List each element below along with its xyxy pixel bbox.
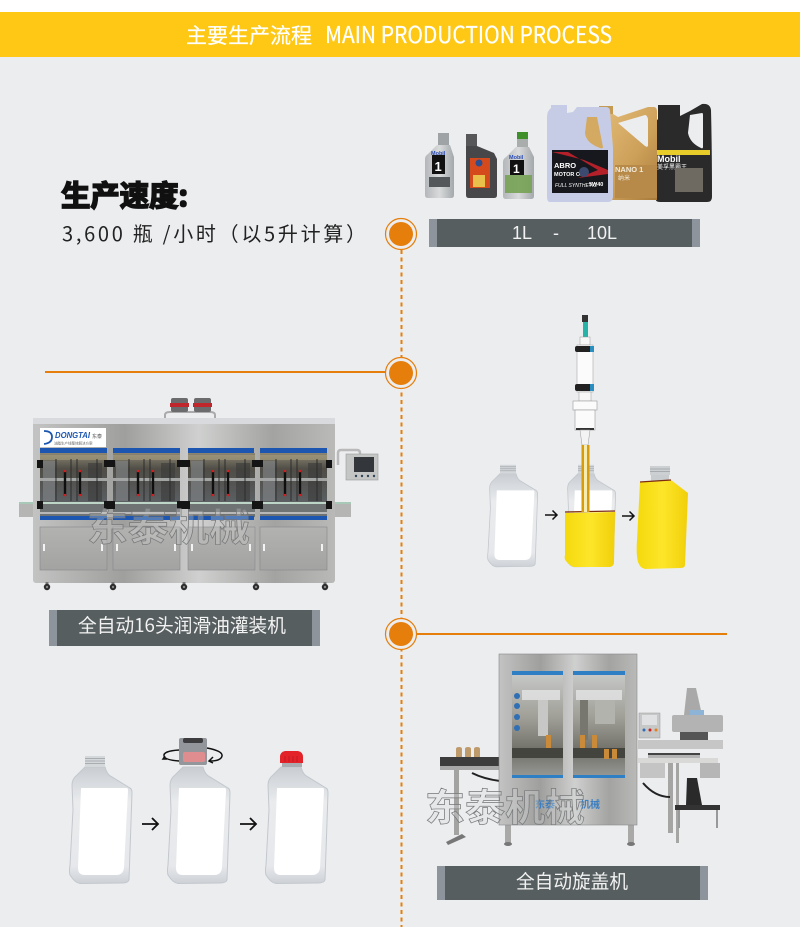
control panel bbox=[338, 450, 378, 480]
windows bbox=[512, 671, 625, 778]
watermark: 东泰机械 bbox=[87, 497, 250, 552]
timeline connector right bbox=[414, 633, 727, 635]
panel lettering: 机械 bbox=[580, 796, 600, 811]
machine body bbox=[33, 418, 335, 583]
icon: gold 4L jug: NANO 1 bbox=[615, 165, 643, 174]
icon: Mobil green 1L bottle: 1 bbox=[513, 162, 520, 176]
title banner: 主要生产流程 bbox=[186, 20, 312, 50]
icon: lavender ABRO jug: 5W40 bbox=[589, 182, 603, 188]
label bar: volume range: - bbox=[553, 223, 559, 243]
arrow: fill step 2 bbox=[622, 512, 634, 520]
timeline node 1 bbox=[386, 218, 416, 250]
icon: Mobil silver 1L bottle bbox=[425, 133, 454, 198]
icon: lavender ABRO jug: ABRO bbox=[554, 161, 576, 170]
label bar: filling machine: 全自动16头润滑油灌装机 bbox=[78, 611, 286, 638]
logo plate: 东泰 bbox=[92, 433, 102, 440]
empty bottle bbox=[488, 465, 538, 567]
capping machine bbox=[425, 654, 723, 846]
title banner bbox=[0, 12, 800, 57]
bottle under capper bbox=[163, 738, 230, 884]
label bar: volume range: 10L bbox=[587, 223, 617, 243]
cabinet doors bbox=[40, 527, 327, 570]
diagram: filling nozzle and bottles bbox=[488, 315, 688, 569]
frame clamps bbox=[37, 460, 332, 509]
icon: black 4L jug: Mobil bbox=[657, 154, 680, 164]
fill bays bbox=[40, 453, 327, 517]
icon: black 4L jug: 美孚黑霸王 bbox=[657, 162, 687, 171]
right conveyor and cap feeder bbox=[638, 688, 723, 843]
icon: Mobil green 1L bottle: Mobil bbox=[509, 155, 524, 161]
speed value: 3,600 瓶 /小时（以5升计算） bbox=[62, 218, 366, 247]
conveyor extensions bbox=[19, 502, 351, 517]
arrow: cap step 1 bbox=[142, 818, 158, 830]
timeline connector left bbox=[45, 371, 388, 373]
blue bands bbox=[512, 671, 625, 778]
panel lettering bbox=[535, 796, 600, 811]
icon: Mobil silver 1L bottle: Mobil bbox=[431, 151, 446, 157]
filling bottle bbox=[565, 445, 616, 567]
watermark: 东泰机械 bbox=[425, 777, 585, 832]
icon: black 4L jug bbox=[655, 104, 712, 202]
icon: lavender ABRO jug bbox=[547, 105, 613, 202]
filling machine bbox=[19, 398, 378, 590]
arrow: fill step 1 bbox=[545, 510, 557, 520]
label bar: capping machine bbox=[437, 866, 708, 900]
icon: oil bottles row bbox=[425, 104, 712, 202]
speed heading: 生产速度: bbox=[61, 173, 188, 215]
safety icons bbox=[514, 693, 520, 731]
cabinet frame bbox=[499, 654, 637, 825]
logo plate: 油脂生产线整体解决方案 bbox=[54, 440, 93, 446]
icon: gold 4L jug: 纳米 bbox=[618, 173, 630, 182]
timeline node 2 bbox=[386, 358, 416, 388]
icon: gold 4L jug bbox=[590, 106, 657, 200]
label bar: volume range bbox=[429, 219, 700, 247]
timeline node 3 bbox=[386, 618, 416, 650]
icon: lavender ABRO jug: FULL SYNTHETIC bbox=[555, 183, 597, 189]
icon: Mobil silver 1L bottle: 1 bbox=[434, 159, 442, 174]
arrow: cap step 2 bbox=[240, 818, 256, 830]
filled bottle bbox=[637, 466, 688, 569]
logo plate: DONGTAI bbox=[55, 430, 91, 440]
icon: dark 1L bottle bbox=[466, 134, 497, 198]
legs bbox=[504, 825, 635, 846]
label bar: capping machine: 全自动旋盖机 bbox=[516, 867, 628, 894]
label bar: volume range: 1L bbox=[512, 223, 532, 243]
timeline dotted line bbox=[400, 250, 402, 927]
open bottle bbox=[70, 756, 132, 884]
panel lettering: 东泰 bbox=[535, 796, 555, 811]
icon: lavender ABRO jug: MOTOR OIL bbox=[554, 172, 586, 178]
blue bands bbox=[40, 448, 327, 520]
nozzle bbox=[573, 315, 597, 445]
wheels bbox=[44, 582, 328, 590]
title banner: MAIN PRODUCTION PROCESS bbox=[325, 16, 612, 50]
diagram: capping bottles bbox=[70, 738, 328, 884]
icon: Mobil green 1L bottle bbox=[503, 132, 534, 199]
top valves bbox=[165, 398, 215, 418]
left conveyor bbox=[440, 747, 500, 845]
label bar: filling machine bbox=[49, 610, 320, 646]
capped bottle bbox=[266, 751, 328, 884]
logo plate bbox=[40, 428, 106, 447]
